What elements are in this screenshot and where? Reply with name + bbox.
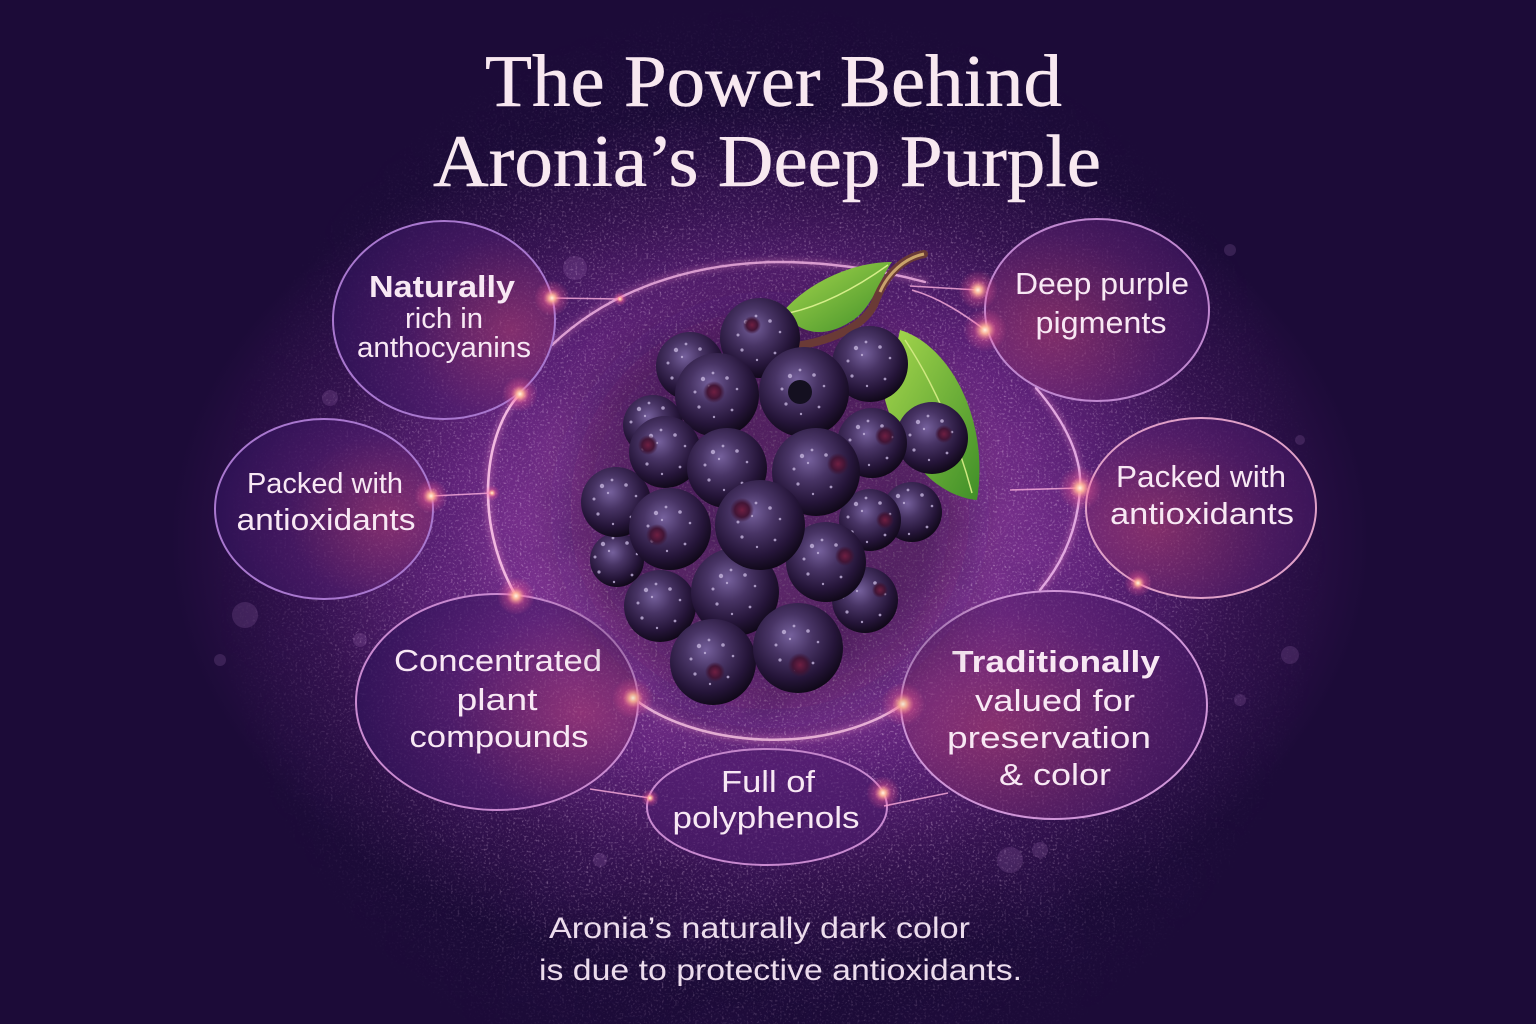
panel: deep purple pigments xyxy=(985,219,1209,401)
panel: concentrated plant compounds: Concentrated xyxy=(394,643,602,678)
panel: packed with antioxidants left: antioxidants xyxy=(236,502,416,537)
panel: full of polyphenols: Full of xyxy=(721,764,815,799)
panel: traditionally valued xyxy=(901,591,1207,819)
panel: packed with antioxidants left: Packed with xyxy=(247,468,403,500)
panel: full of polyphenols xyxy=(647,749,887,865)
title: The Power Behind xyxy=(485,41,1062,123)
panel: deep purple pigments: pigments xyxy=(1036,305,1166,340)
panel: naturally rich in anthocyanins: rich in xyxy=(405,303,483,335)
panel: traditionally valued: Traditionally xyxy=(952,644,1161,679)
panel: naturally rich in anthocyanins xyxy=(333,221,555,419)
title: Aronia’s Deep Purple xyxy=(433,121,1101,203)
panel: traditionally valued: valued for xyxy=(975,683,1135,718)
background mottling xyxy=(544,430,1037,727)
panel: concentrated plant compounds: compounds xyxy=(410,719,588,754)
panel: full of polyphenols: polyphenols xyxy=(672,800,860,835)
footer caption xyxy=(539,912,1022,987)
glowing nodes xyxy=(414,270,1152,810)
panel: traditionally valued: & color xyxy=(999,757,1111,792)
star speckle xyxy=(238,27,1303,1024)
title xyxy=(433,41,1101,203)
shadow behind berries xyxy=(570,310,970,710)
footer caption: is due to protective antioxidants. xyxy=(539,954,1022,987)
panel: packed with antioxidants left xyxy=(215,419,433,599)
berries xyxy=(581,298,968,705)
footer caption: Aronia’s naturally dark color xyxy=(549,912,970,945)
panel: packed with antioxidants right xyxy=(1086,418,1316,598)
bokeh particles xyxy=(214,244,1305,873)
central ring segments xyxy=(488,262,1080,740)
panel: naturally rich in anthocyanins: anthocyanins xyxy=(357,332,531,364)
panel: deep purple pigments: Deep purple xyxy=(1015,266,1189,301)
panel: naturally rich in anthocyanins: Naturally xyxy=(369,269,516,304)
panel: concentrated plant compounds: plant xyxy=(456,682,538,717)
icon: stem and leaves xyxy=(783,254,979,500)
panel: packed with antioxidants right: Packed with xyxy=(1116,459,1286,494)
panel: traditionally valued: preservation xyxy=(947,720,1151,755)
panel: packed with antioxidants right: antioxidants xyxy=(1110,496,1294,531)
icon: aronia berry cluster xyxy=(581,254,979,705)
panel: concentrated plant compounds xyxy=(356,594,638,810)
connector lines xyxy=(431,286,1080,806)
